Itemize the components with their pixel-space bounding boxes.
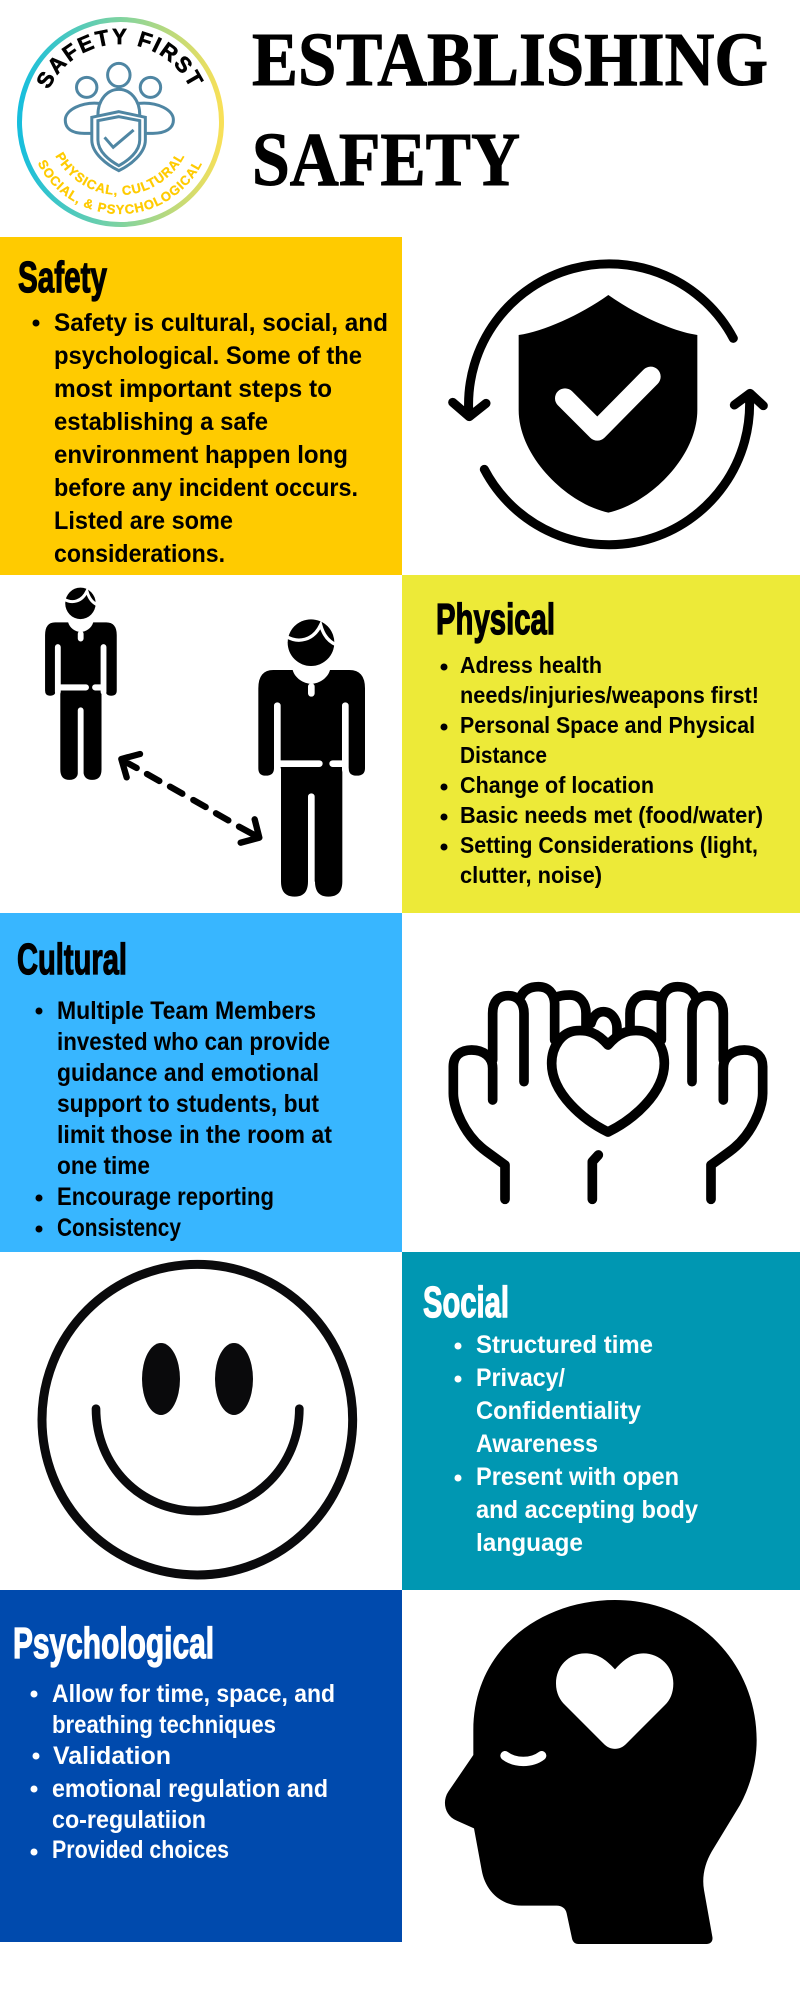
text block: physical bullets: Personal Space and Physical	[460, 712, 755, 738]
text block: social bullets	[454, 1331, 698, 1557]
text block: safety description: considerations.	[54, 540, 225, 568]
text block: cultural bullets: Multiple Team Members	[57, 997, 316, 1025]
panel: physical	[402, 575, 800, 913]
text block: physical bullets: needs/injuries/weapons first!	[460, 682, 759, 708]
logo: safety first badge: SAFETY FIRST	[37, 28, 204, 88]
heading: psychological: Psychological	[13, 1619, 214, 1668]
text block: cultural bullets	[36, 997, 333, 1242]
text block: physical bullets: Change of location	[460, 772, 654, 798]
text block: physical bullets: Setting Considerations (light,	[460, 832, 758, 858]
text block: social bullets: Awareness	[476, 1430, 598, 1458]
icon: shield with circular arrows	[453, 264, 763, 545]
text block: social bullets: Privacy/	[476, 1364, 565, 1392]
text block: safety description: before any incident occurs.	[54, 474, 358, 502]
text block: social bullets: and accepting body	[476, 1496, 698, 1524]
arrow: dashed double-headed distance arrow	[121, 754, 259, 843]
text block: social bullets: Present with open	[476, 1463, 679, 1491]
heading: physical: Physical	[436, 595, 555, 644]
text block: safety description: establishing a safe	[54, 408, 268, 436]
text block: cultural bullets: limit those in the room at	[57, 1121, 333, 1149]
icon: large person	[258, 619, 365, 898]
text block: safety description: most important steps to	[54, 375, 332, 403]
text block: social bullets: Confidentiality	[476, 1397, 641, 1425]
text block: social bullets: language	[476, 1529, 583, 1557]
text block: physical bullets: Distance	[460, 742, 547, 768]
text block: safety description: Safety is cultural, social, and	[54, 309, 388, 337]
text block: cultural bullets: invested who can provide	[57, 1028, 330, 1056]
logo: safety first badge: SOCIAL, & PSYCHOLOGICAL	[38, 160, 202, 214]
icon: smiley face	[42, 1264, 353, 1575]
panel: social	[402, 1252, 800, 1590]
text block: psychological bullets	[30, 1680, 335, 1864]
text block: physical bullets: clutter, noise)	[460, 862, 602, 888]
text block: psychological bullets: Provided choices	[52, 1836, 229, 1864]
text block: physical bullets: Basic needs met (food/water)	[460, 802, 763, 828]
icon: two people with distance arrow	[45, 588, 365, 898]
text block: safety description	[32, 309, 388, 568]
heading: social: Social	[423, 1278, 509, 1327]
text block: cultural bullets: support to students, but	[57, 1090, 320, 1118]
title	[252, 18, 768, 202]
text block: cultural bullets: guidance and emotional	[57, 1059, 319, 1087]
text block: safety description: Listed are some	[54, 507, 233, 535]
icon: hands holding heart	[453, 987, 763, 1199]
heading: cultural: Cultural	[17, 935, 127, 984]
text block: psychological bullets: breathing techniques	[52, 1711, 276, 1739]
icon: small person	[45, 588, 117, 781]
text block: physical bullets	[440, 652, 763, 888]
logo: safety first badge: PHYSICAL, CULTURAL	[55, 152, 184, 197]
panel: cultural	[0, 913, 402, 1252]
text block: cultural bullets: Encourage reporting	[57, 1183, 274, 1211]
text block: social bullets: Structured time	[476, 1331, 653, 1359]
text block: safety description: psychological. Some of the	[54, 342, 362, 370]
title: SAFETY	[252, 118, 520, 202]
text block: psychological bullets: emotional regulation and	[52, 1775, 328, 1803]
panel: psychological	[0, 1590, 402, 1942]
icon: head with heart	[445, 1600, 757, 1944]
logo: safety first badge	[17, 17, 224, 227]
text block: psychological bullets: Allow for time, space, and	[52, 1680, 335, 1708]
text block: psychological bullets: Validation	[53, 1742, 171, 1770]
text block: safety description: environment happen long	[54, 441, 348, 469]
heading: safety: Safety	[18, 253, 107, 302]
text block: cultural bullets: Consistency	[57, 1214, 181, 1242]
text block: physical bullets: Adress health	[460, 652, 602, 678]
panel: safety	[0, 237, 402, 575]
text block: psychological bullets: co-regulatiion	[52, 1806, 206, 1834]
text block: cultural bullets: one time	[57, 1152, 150, 1180]
